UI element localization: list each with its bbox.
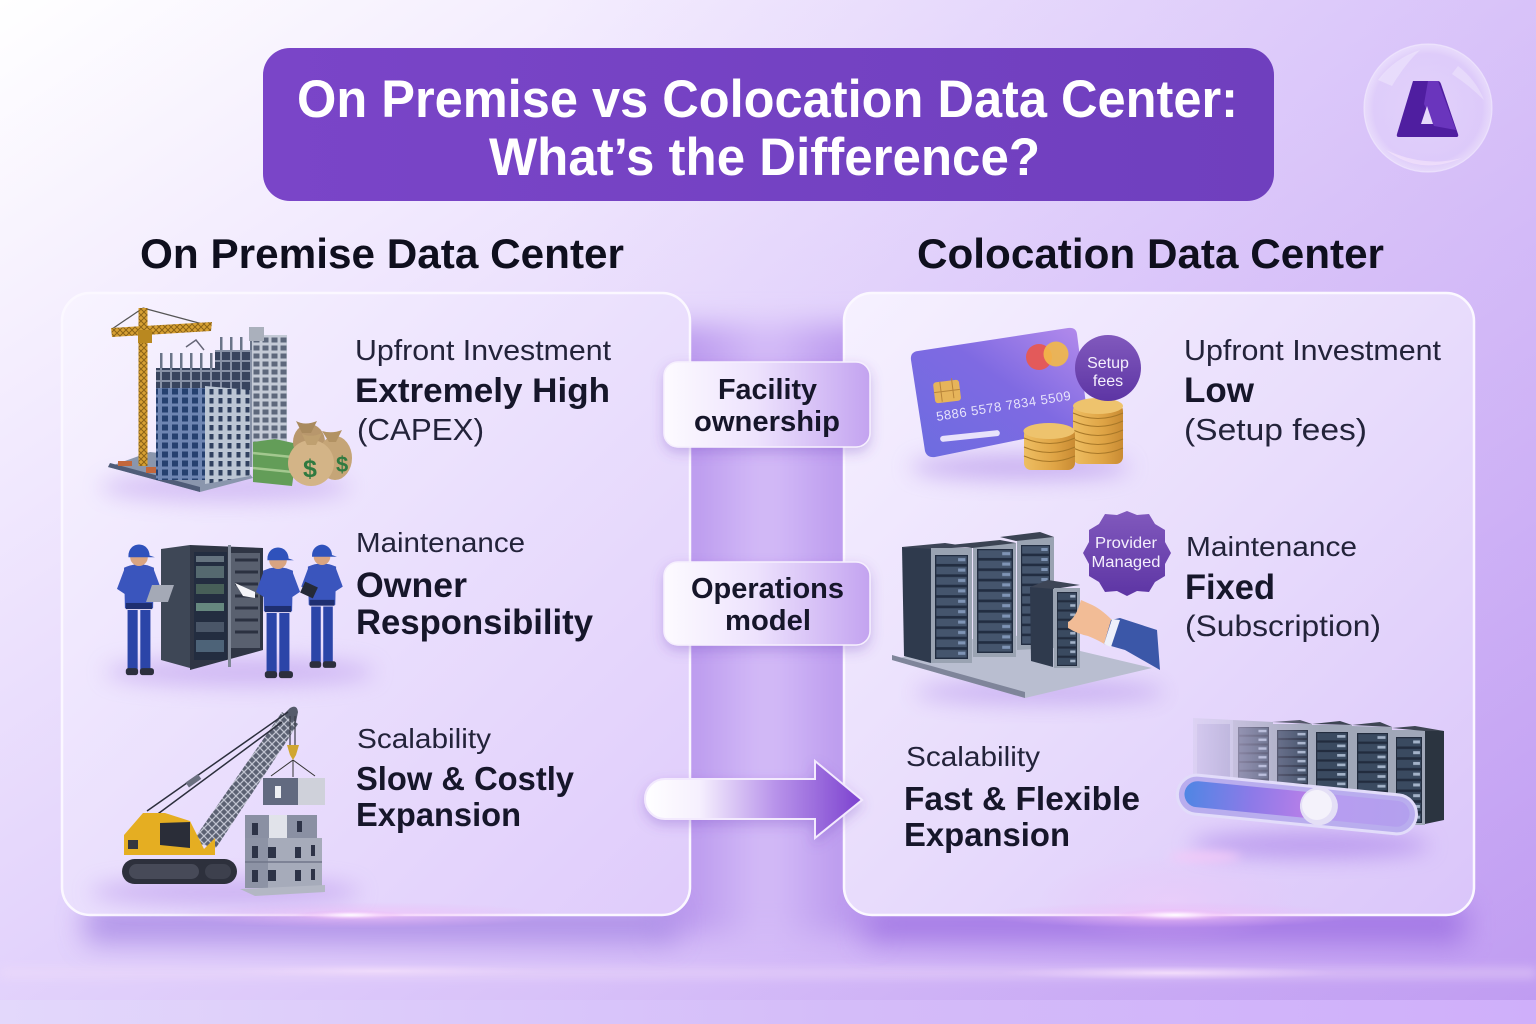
title text: What’s the Difference? bbox=[489, 128, 1040, 187]
text: scalability fast and flexible: Fast & Flexible bbox=[904, 780, 1140, 817]
heading: on premise: On Premise Data Center bbox=[140, 230, 624, 277]
icon: credit card with coins and setup fees badge: 5886 5578 7834 5509 bbox=[935, 388, 1072, 424]
badge: provider managed bbox=[1083, 511, 1171, 596]
bottom glow left bbox=[175, 902, 555, 928]
text: scalability slow and costly bbox=[356, 723, 575, 833]
badge: setup fees bbox=[1075, 335, 1141, 401]
coins left stack bbox=[1024, 423, 1075, 470]
text: upfront investment extremely high: Upfront Investment bbox=[355, 335, 611, 367]
icon: server row with slider bbox=[1169, 718, 1444, 862]
badge: provider managed: Provider bbox=[1095, 535, 1158, 552]
badge: provider managed: Managed bbox=[1092, 554, 1160, 571]
text: scalability slow and costly: Expansion bbox=[356, 796, 521, 833]
arrow: on premise to colocation bbox=[645, 761, 862, 838]
text: maintenance fixed bbox=[1185, 531, 1381, 643]
title text: On Premise vs Colocation Data Center: bbox=[297, 70, 1238, 129]
pill: operations model: Operations bbox=[691, 573, 844, 605]
icon: hand bbox=[1068, 600, 1160, 670]
text: upfront investment low: Low bbox=[1184, 371, 1255, 410]
title banner bbox=[263, 48, 1274, 201]
text: scalability slow and costly: Scalability bbox=[357, 723, 491, 754]
center channel and panel shadows bbox=[0, 325, 1536, 980]
heading: colocation: Colocation Data Center bbox=[917, 230, 1384, 277]
panel: colocation bbox=[844, 293, 1474, 945]
text: maintenance fixed: Fixed bbox=[1185, 568, 1275, 607]
text: upfront investment low bbox=[1184, 335, 1441, 447]
icon: crawler crane with modular block bbox=[90, 707, 360, 905]
text: upfront investment extremely high bbox=[355, 335, 611, 447]
text: upfront investment low: Upfront Investment bbox=[1184, 335, 1441, 367]
text: scalability slow and costly: Slow & Costly bbox=[356, 760, 575, 797]
text: maintenance owner responsibility: Maintenance bbox=[356, 527, 525, 558]
icon: money bags bbox=[288, 421, 352, 486]
bottom glow right bbox=[980, 855, 1360, 945]
text: scalability fast and flexible bbox=[904, 741, 1140, 853]
text: maintenance fixed: (Subscription) bbox=[1185, 610, 1381, 643]
coins right stack bbox=[1073, 398, 1123, 464]
pill: facility ownership bbox=[664, 362, 870, 447]
text: upfront investment low: (Setup fees) bbox=[1184, 412, 1367, 447]
icon: money bags: $ bbox=[336, 452, 348, 477]
icon: credit card with coins and setup fees badge bbox=[910, 328, 1141, 480]
text: maintenance owner responsibility bbox=[356, 527, 594, 642]
text: maintenance owner responsibility: Owner bbox=[356, 566, 467, 605]
pill: facility ownership: Facility bbox=[718, 374, 817, 406]
icon: cash stack bbox=[253, 439, 298, 486]
badge: setup fees: Setup bbox=[1087, 355, 1129, 372]
text: upfront investment extremely high: Extremely High bbox=[355, 372, 610, 410]
title text bbox=[297, 70, 1238, 187]
badge: setup fees: fees bbox=[1093, 373, 1123, 390]
panel: on premise bbox=[62, 293, 690, 928]
pill: facility ownership: ownership bbox=[694, 406, 840, 438]
text: maintenance owner responsibility: Responsibility bbox=[356, 603, 594, 642]
pill: operations model: model bbox=[725, 605, 811, 637]
pill: operations model bbox=[664, 562, 870, 645]
icon: server racks with hand and provider managed badge bbox=[892, 511, 1171, 704]
icon: technicians and server rack bbox=[105, 544, 375, 686]
icon: money bags: $ bbox=[303, 455, 317, 483]
text: scalability fast and flexible: Expansion bbox=[904, 816, 1070, 853]
logo: bubble with letter A bbox=[1364, 44, 1492, 172]
text: scalability fast and flexible: Scalability bbox=[906, 741, 1040, 772]
text: maintenance fixed: Maintenance bbox=[1186, 531, 1357, 562]
icon: construction and money bbox=[100, 308, 352, 502]
text: upfront investment extremely high: (CAPEX) bbox=[357, 412, 484, 447]
